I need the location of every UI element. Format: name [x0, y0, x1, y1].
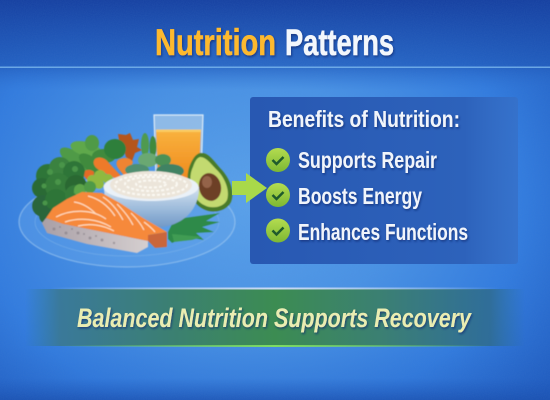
title: Nutrition — [155, 22, 276, 63]
salmon steak — [42, 192, 167, 253]
title — [155, 22, 394, 63]
food illustration — [19, 115, 235, 267]
plate — [19, 177, 235, 267]
benefit: supports repair: Supports Repair — [298, 147, 437, 173]
benefit: enhances functions: Enhances Functions — [298, 219, 468, 245]
arrow — [232, 173, 267, 203]
panel heading: Benefits of Nutrition: — [268, 106, 460, 132]
bottom banner — [25, 288, 525, 347]
bowl of rice — [104, 171, 199, 228]
benefit: boosts energy — [266, 183, 422, 209]
herbs behind bowl — [125, 153, 184, 178]
glass of orange juice — [154, 115, 203, 180]
broccoli — [32, 157, 87, 224]
avocado — [188, 153, 232, 212]
benefit: supports repair — [266, 147, 437, 173]
leafy greens — [56, 135, 126, 181]
benefit: enhances functions — [266, 218, 468, 245]
herbs lower right — [168, 213, 220, 243]
title: Patterns — [285, 22, 394, 63]
benefits panel — [250, 97, 518, 264]
carrots — [84, 158, 133, 182]
benefit: boosts energy: Boosts Energy — [298, 183, 422, 209]
light broccoli floret — [74, 170, 113, 196]
rust and upright leaves — [118, 133, 156, 161]
